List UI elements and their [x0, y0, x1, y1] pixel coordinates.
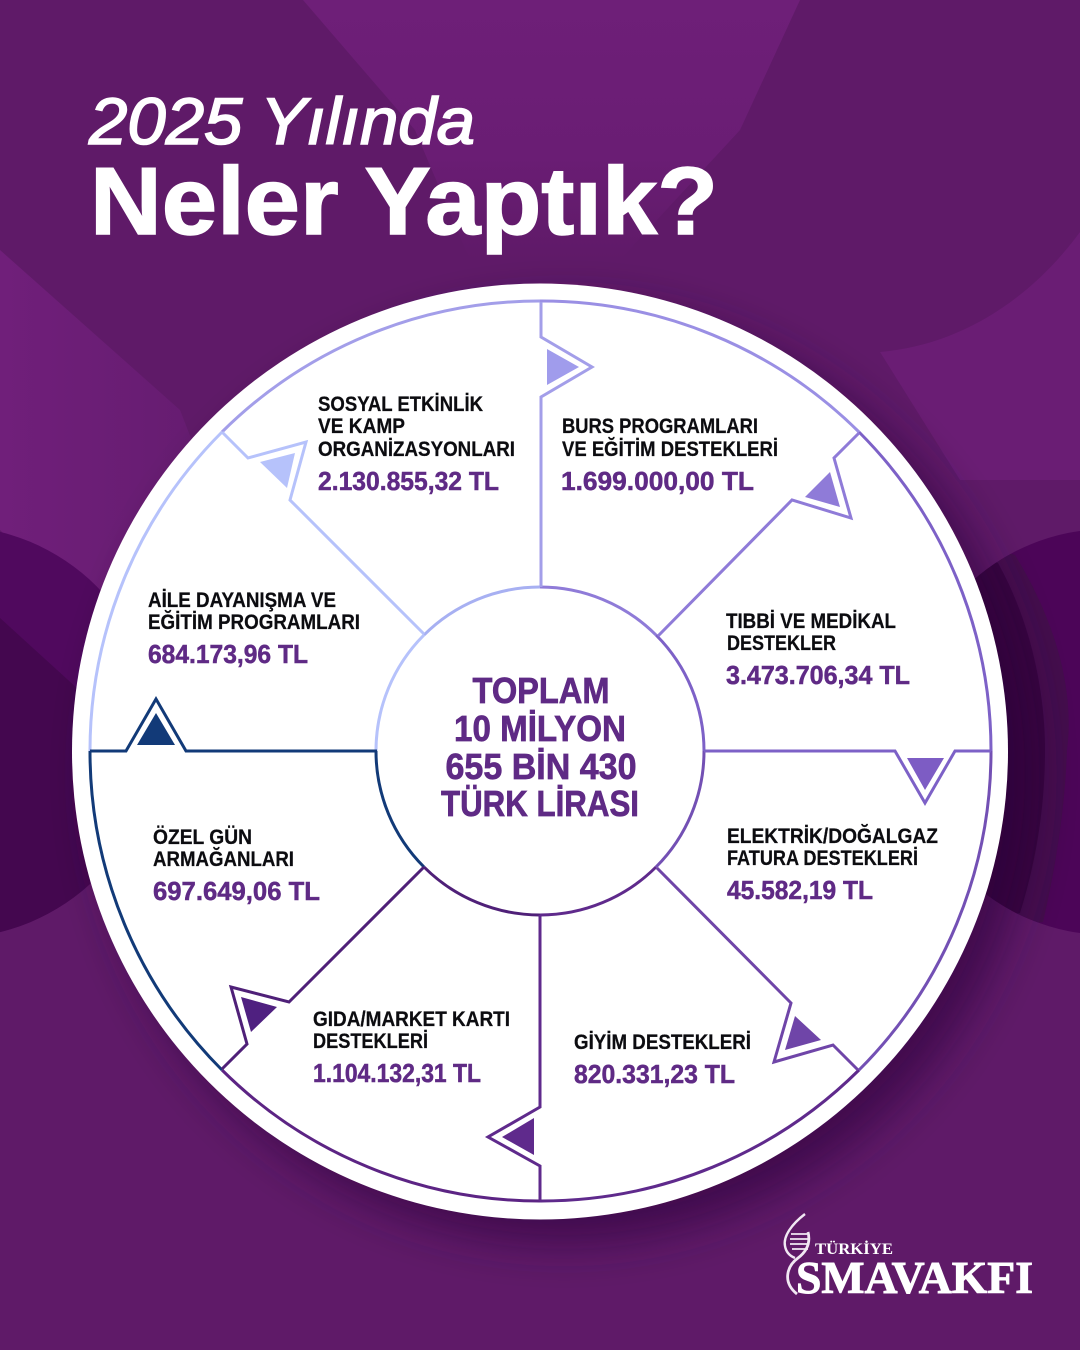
- item: elektrik: 45.582,19 TL: [727, 875, 873, 905]
- item: ozel gun: ARMAĞANLARI: [153, 847, 294, 871]
- center total: [441, 670, 639, 824]
- divider: elektrik: [704, 751, 991, 803]
- item: burs: VE EĞİTİM DESTEKLERİ: [562, 437, 778, 461]
- item: giyim: GİYİM DESTEKLERİ: [574, 1031, 751, 1054]
- item: gida: GIDA/MARKET KARTI: [313, 1008, 510, 1031]
- outer ring segments: [90, 301, 991, 1201]
- item: gida: 1.104.132,31 TL: [313, 1058, 481, 1088]
- white disc: [72, 284, 1008, 1220]
- divider: giyim: [657, 868, 858, 1070]
- item: elektrik: FATURA DESTEKLERİ: [727, 847, 918, 870]
- item: aile: 684.173,96 TL: [148, 639, 308, 669]
- item: giyim: [574, 1031, 751, 1089]
- item: tibbi: TIBBİ VE MEDİKAL: [726, 610, 896, 633]
- divider: ozel gun: [222, 867, 424, 1069]
- item: tibbi: DESTEKLER: [727, 632, 836, 655]
- icon: dna: [785, 1214, 809, 1294]
- item: tibbi: 3.473.706,34 TL: [726, 660, 910, 690]
- item: burs: 1.699.000,00 TL: [561, 466, 754, 496]
- item: gida: DESTEKLERİ: [313, 1030, 428, 1053]
- wheel: [72, 284, 1008, 1220]
- item: aile: [148, 589, 360, 669]
- title: [88, 84, 718, 255]
- title: 2025 Yılında: [88, 84, 475, 158]
- item: giyim: 820.331,23 TL: [574, 1059, 735, 1089]
- item: burs: BURS PROGRAMLARI: [562, 415, 758, 438]
- item: burs: [561, 415, 778, 496]
- center total: TÜRK LİRASI: [441, 783, 639, 824]
- item: tibbi: [726, 610, 910, 690]
- logo: SMAVAKFI: [796, 1253, 1033, 1303]
- logo: [785, 1214, 1033, 1303]
- item: ozel gun: 697.649,06 TL: [153, 876, 320, 906]
- center total: TOPLAM: [472, 670, 610, 711]
- item: sosyal: 2.130.855,32 TL: [318, 466, 499, 496]
- divider: burs: [541, 302, 592, 587]
- item: elektrik: [727, 824, 938, 905]
- divider: gida: [488, 915, 540, 1201]
- logo: TÜRKİYE: [815, 1241, 893, 1258]
- divider: aile: [90, 699, 377, 751]
- item: aile: EĞİTİM PROGRAMLARI: [148, 610, 360, 634]
- divider: sosyal: [222, 432, 424, 634]
- item: sosyal: VE KAMP: [318, 415, 405, 438]
- item: ozel gun: [153, 826, 320, 906]
- title: Neler Yaptık?: [90, 148, 718, 255]
- item: ozel gun: ÖZEL GÜN: [153, 826, 252, 849]
- center total: 10 MİLYON: [454, 708, 626, 749]
- divider: tibbi: [658, 433, 859, 636]
- center total: 655 BİN 430: [446, 746, 636, 787]
- inner circle segments: [376, 587, 704, 915]
- item: aile: AİLE DAYANIŞMA VE: [148, 589, 336, 612]
- item: sosyal: ORGANİZASYONLARI: [318, 438, 515, 461]
- item: elektrik: ELEKTRİK/DOĞALGAZ: [727, 824, 938, 848]
- item: sosyal: [318, 393, 515, 496]
- item: sosyal: SOSYAL ETKİNLİK: [318, 393, 483, 416]
- item: gida: [313, 1008, 510, 1088]
